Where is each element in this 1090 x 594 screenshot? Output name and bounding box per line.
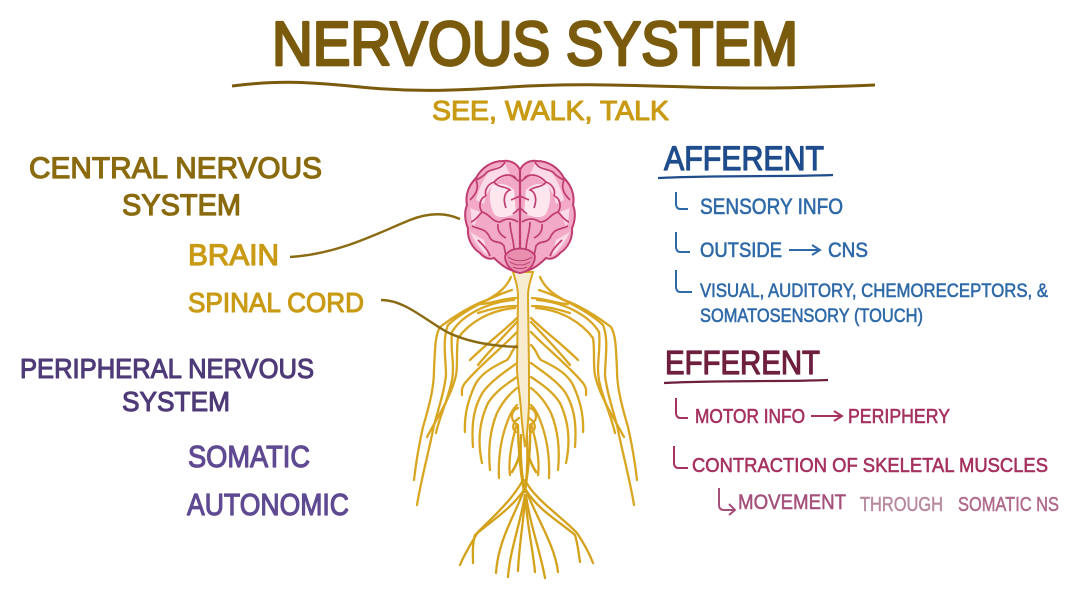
efferent list bbox=[674, 398, 1048, 477]
afferent list: OUTSIDE bbox=[700, 239, 782, 262]
right torso nerves bbox=[529, 298, 586, 478]
brain left highlights and folds bbox=[470, 162, 520, 256]
nervous system figure bbox=[414, 272, 637, 578]
afferent list: SENSORY INFO bbox=[700, 194, 843, 219]
afferent list: CNS bbox=[828, 239, 868, 262]
central fissure bbox=[519, 170, 521, 250]
heading: efferent: EFFERENT bbox=[665, 344, 820, 381]
efferent list: MOTOR INFO bbox=[695, 405, 805, 428]
brain bbox=[465, 161, 575, 273]
label: autonomic: AUTONOMIC bbox=[187, 487, 349, 522]
connector: brain bbox=[290, 214, 460, 257]
movement line: THROUGH bbox=[860, 494, 943, 516]
brain outline bbox=[465, 161, 575, 273]
movement line: MOVEMENT bbox=[738, 491, 846, 514]
efferent list: CONTRACTION OF SKELETAL MUSCLES bbox=[692, 454, 1048, 477]
brain right highlights and folds bbox=[520, 162, 570, 256]
subtitle: SEE, WALK, TALK bbox=[432, 95, 669, 126]
heading: peripheral nervous system: SYSTEM bbox=[122, 386, 230, 417]
connector: spinal cord bbox=[381, 300, 518, 347]
label: somatic: SOMATIC bbox=[188, 439, 310, 474]
heading: peripheral nervous system: PERIPHERAL NERVOUS bbox=[20, 353, 314, 384]
spinal cord bbox=[513, 272, 533, 447]
heading: afferent: AFFERENT bbox=[664, 140, 824, 178]
efferent list: PERIPHERY bbox=[848, 405, 950, 428]
afferent list bbox=[676, 192, 1048, 327]
label: brain: BRAIN bbox=[188, 239, 279, 272]
title: NERVOUS SYSTEM bbox=[272, 10, 798, 79]
left arm nerves bbox=[414, 277, 515, 505]
label: spinal cord: SPINAL CORD bbox=[188, 287, 364, 318]
movement line bbox=[719, 488, 1059, 516]
heading: peripheral nervous system bbox=[20, 353, 314, 417]
heading: central nervous system bbox=[29, 152, 322, 222]
cauda and leg nerves bbox=[460, 425, 593, 578]
heading: central nervous system: CENTRAL NERVOUS bbox=[29, 152, 322, 185]
movement line: SOMATIC NS bbox=[958, 494, 1059, 516]
right arm nerves bbox=[536, 277, 637, 505]
cerebellum bbox=[505, 248, 535, 273]
heading: central nervous system: SYSTEM bbox=[122, 189, 241, 222]
title underline bbox=[232, 82, 875, 90]
afferent list: SOMATOSENSORY (TOUCH) bbox=[700, 305, 923, 327]
left torso nerves bbox=[462, 298, 519, 478]
